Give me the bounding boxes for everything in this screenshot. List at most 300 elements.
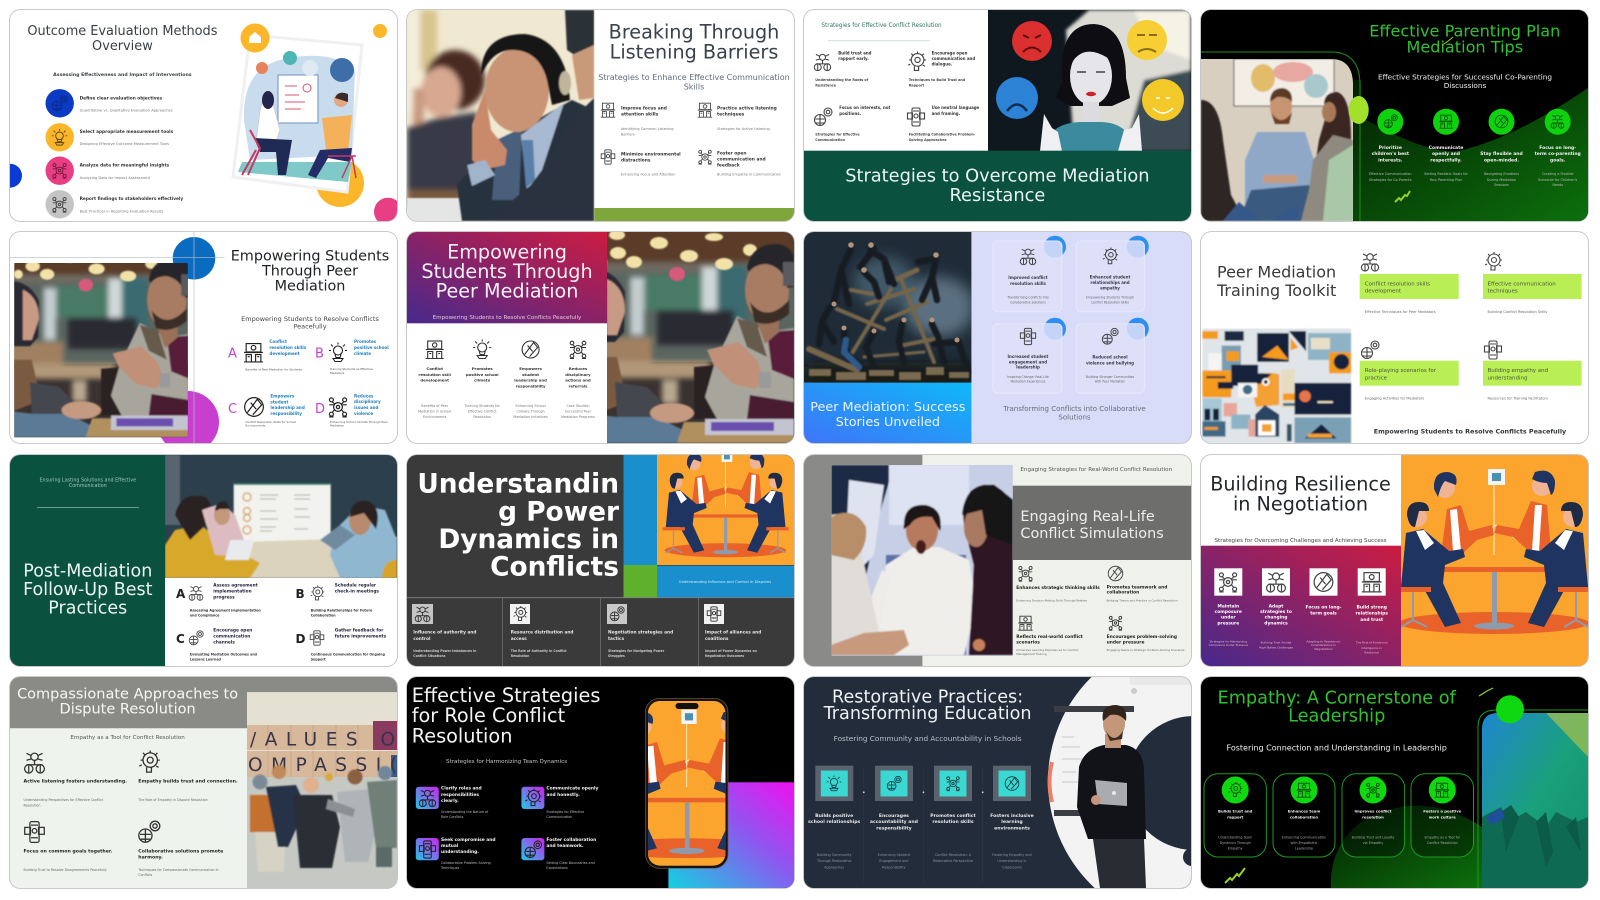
- item: role-play: Role-playing scenarios for: [1365, 368, 1437, 374]
- column: long-term goals: Needs: [1552, 183, 1563, 187]
- item: collaborative solutions: Collaborative solutions promote: [138, 848, 223, 854]
- card: trust: Builds trust and: [1218, 809, 1253, 814]
- column: communicate: [1424, 109, 1468, 182]
- photo: values blocks and figures: [247, 692, 397, 888]
- item: compromise: Collaborative Problem-Solving: [441, 861, 491, 865]
- subtitle: Assessing Effectiveness and Impact of Interventions: [53, 72, 192, 78]
- separator dots: [863, 791, 984, 793]
- column: school climate: Training Students for: [464, 404, 500, 408]
- item: minimize distractions: Minimize environmental: [621, 152, 681, 158]
- item: communicate: and honestly.: [546, 792, 580, 798]
- column: authority: control: [413, 636, 431, 642]
- item: teamwork: Foster collaboration: [546, 837, 596, 843]
- background: green gradient: [1351, 80, 1588, 221]
- item: open dialogue: [908, 50, 975, 87]
- column: inclusive: [990, 766, 1034, 869]
- subtitle: Empowering Students to Resolve Conflicts Peacefully: [433, 315, 582, 321]
- column: long-term goals: [1306, 568, 1342, 651]
- item: skills: Conflict resolution skills: [1365, 281, 1430, 287]
- item: empathy builds trust: [137, 750, 238, 802]
- title: Overview: [92, 39, 153, 54]
- column: leadership: leadership and: [514, 378, 547, 383]
- item: common goals: Focus on common goals together.: [24, 848, 113, 854]
- panel: Understanding Power Dynamics in Conflicts: [407, 455, 794, 666]
- panel: Engaging Real-Life Conflict Simulations: [804, 455, 1191, 666]
- subtitle: Strategies for Overcoming Challenges and Achieving Success: [1214, 538, 1387, 544]
- column: conflict skills: resolution skills: [932, 819, 974, 825]
- column: inclusive: Fosters inclusive: [990, 813, 1034, 819]
- title: Resistance: [949, 185, 1045, 206]
- item A: Benefits of Peer Mediation for Students: [245, 368, 303, 372]
- column: stay flexible: Navigating Emotions: [1484, 172, 1519, 176]
- card: work culture: Empathy as a Tool for: [1424, 836, 1461, 840]
- item D: [296, 628, 387, 661]
- item: skills: Effective Techniques for Peer Mediators: [1365, 310, 1436, 314]
- item C: leadership and: [270, 405, 305, 410]
- photo: heated argument: [832, 465, 1013, 656]
- column: discipline: referrals: [568, 383, 588, 388]
- title: Mediation: [275, 278, 345, 294]
- item: trust: Understanding the Roots of: [815, 78, 869, 82]
- column: children's interests: [1369, 109, 1412, 182]
- column: composure: [1209, 568, 1248, 647]
- subtitle: Fostering Connection and Understanding in Leadership: [1227, 744, 1447, 753]
- card: conflict resolution: Collaborative Solutions: [1010, 300, 1046, 304]
- title: Peer Mediation: [436, 280, 578, 302]
- photo: team meeting at whiteboard: [165, 455, 397, 578]
- column: authority: Conflict Situations: [413, 654, 446, 658]
- decorative circle: blue: [173, 237, 215, 280]
- card: engagement: leadership: [1016, 365, 1040, 370]
- item: neutral language: Facilitating Collaborative Problem-: [909, 132, 976, 136]
- column: skill development: Environments: [423, 415, 447, 419]
- card: team collaboration: with Empathetic: [1291, 841, 1318, 845]
- card: team collaboration: Enhances team: [1288, 809, 1320, 814]
- card: relationships: empathy: [1100, 285, 1120, 290]
- item D: Reduces: [354, 393, 374, 398]
- title: g Power: [498, 496, 619, 528]
- title: Peer Mediation: [1217, 262, 1336, 282]
- item: problem-solving: Encourages problem-solving: [1107, 634, 1177, 640]
- item B: climate: [354, 351, 371, 356]
- card: conflict resolution: Improved conflict: [1008, 275, 1048, 280]
- item: neutral language: and framing.: [932, 111, 961, 116]
- column: resources: The Role of Authority in Conflict: [511, 649, 567, 653]
- column: resources: Resource distribution and: [511, 630, 574, 636]
- column: school climate: climate: [474, 378, 491, 383]
- item: open communication: [699, 150, 781, 176]
- item A: resolution skills: [269, 345, 307, 350]
- column: long-term goals: Focus on long-: [1306, 604, 1342, 610]
- column: long-term goals: goals.: [1550, 157, 1566, 163]
- column: adapt: High-Stakes Challenges: [1259, 646, 1294, 650]
- column: discipline: Mediation Programs: [561, 415, 595, 419]
- column: adapt: Adapt: [1269, 603, 1283, 609]
- column: relationships: [808, 766, 860, 869]
- item: teamwork: and teamwork.: [546, 843, 584, 849]
- column: communicate: Your Parenting Plan: [1430, 178, 1462, 182]
- item: active listening: Strategies for Active Listening: [717, 127, 770, 131]
- item: improve focus: attention skills: [621, 112, 659, 118]
- column: discipline: Case Studies:: [566, 404, 590, 408]
- item: real-world: scenarios: [1016, 639, 1040, 645]
- card: engagement: Increased student: [1008, 354, 1049, 359]
- title: Post-Mediation: [23, 562, 152, 582]
- column: negotiation: [607, 604, 673, 658]
- subtitle: Fostering Community and Accountability in Schools: [834, 734, 1022, 743]
- item A: and Compliance: [190, 613, 220, 617]
- item: clarify roles: clearly.: [441, 798, 459, 804]
- item B: check-in meetings: [335, 589, 379, 595]
- subtitle: Skills: [684, 82, 704, 91]
- item: teamwork: Bridging Theory and Practice in Conflict Resolution: [1107, 598, 1178, 602]
- item C: C: [228, 402, 237, 417]
- column: leadership: [513, 341, 548, 419]
- column: school climate: [464, 340, 500, 419]
- column: skill development: resolution skill: [418, 372, 451, 377]
- title: Listening Barriers: [610, 40, 778, 64]
- column: authority: Understanding Power Imbalances in: [413, 649, 476, 653]
- item: define objectives: Define clear evaluation objectives: [80, 95, 162, 101]
- item: interests: Strategies for Effective: [815, 132, 860, 136]
- item: interests: Focus on interests, not: [839, 105, 891, 110]
- item: define objectives: [46, 89, 173, 118]
- item: active listening: Active listening fosters understanding.: [24, 778, 127, 784]
- item B: [315, 339, 389, 375]
- title: Conflict Simulations: [1020, 526, 1164, 542]
- column: inclusive: environments: [994, 825, 1030, 831]
- item: compromise: Seek compromise and: [441, 837, 496, 843]
- column: accountability: Engagement and: [879, 859, 908, 863]
- column: long-term goals: [1535, 109, 1581, 187]
- gradient corner: [668, 782, 794, 888]
- title: Transforming Education: [823, 704, 1032, 724]
- column: relationships: relationships: [1356, 610, 1388, 616]
- illustration: collage: [1201, 328, 1352, 443]
- item: clarify roles: Clarify roles and: [441, 786, 482, 792]
- item: real-world: Reflects real-world conflict: [1016, 634, 1083, 640]
- item C: Empowers: [270, 393, 295, 398]
- item D: Enhancing School Climate Through Peer: [330, 420, 389, 424]
- card: team collaboration: collaboration: [1290, 814, 1318, 819]
- column: discipline: Successful Peer: [565, 410, 592, 414]
- column: accountability: accountability and: [870, 819, 918, 825]
- frame outline: [1478, 710, 1588, 888]
- item: collaborative solutions: harmony.: [138, 854, 163, 860]
- item: clarify roles: responsibilities: [441, 792, 479, 798]
- column: resources: Resolution: [511, 654, 529, 658]
- item D: D: [296, 632, 306, 646]
- left green block: [10, 455, 165, 666]
- left gray block: [804, 455, 922, 666]
- item: collaborative solutions: Techniques for Compassionate Communication in: [137, 868, 219, 872]
- illustration: negotiation table: [657, 455, 794, 565]
- column: long-term goals: Negotiations: [1314, 647, 1333, 651]
- subtitle: Empowering Students to Resolve Conflicts Peacefully: [1374, 428, 1567, 436]
- item: role-play: Engaging Activities for Mediators: [1365, 397, 1424, 401]
- item: communication: techniques: [1488, 289, 1518, 295]
- column: relationships: Intelligence in: [1362, 646, 1382, 650]
- card: conflict resolution: Improves conflict: [1355, 809, 1392, 814]
- column: long-term goals: Adapting to Resistance:: [1306, 640, 1341, 644]
- item: open communication: Building Empathy in Communication: [717, 172, 781, 176]
- top text: Communication: [69, 483, 107, 489]
- title: Peer Mediation: Success: [810, 400, 966, 415]
- item: improve focus: Improve focus and: [621, 106, 667, 112]
- column: skill development: Conflict: [426, 366, 443, 371]
- item: measurement tools: Select appropriate measurement tools: [80, 129, 174, 135]
- card: relationships: Conflict Resolution Skills: [1091, 300, 1129, 304]
- card: trust: Dynamics Through: [1220, 841, 1251, 845]
- column: accountability: Enhancing Student: [878, 853, 911, 857]
- column: leadership: Mediation Initiatives: [513, 415, 548, 419]
- title block: [804, 383, 971, 444]
- item: open communication: feedback: [717, 162, 740, 168]
- squiggle bottom: [1225, 868, 1245, 883]
- card: relationships: [1076, 236, 1149, 312]
- item: teamwork: Setting Clear Boundaries and: [546, 861, 595, 865]
- subtitle: Strategies for Effective Conflict Resolution: [821, 23, 942, 29]
- card: team collaboration: [1273, 774, 1335, 857]
- title: Breaking Through: [609, 20, 779, 44]
- column: skill development: Mediation in School: [418, 410, 451, 414]
- title: Resolution: [412, 724, 512, 748]
- card: trust: rapport: [1227, 814, 1243, 819]
- column: communicate: respectfully.: [1430, 157, 1462, 163]
- item D: Mediation: [330, 424, 344, 428]
- item: role-play: practice: [1365, 376, 1388, 382]
- column: discipline: Reduces: [569, 366, 588, 371]
- item B: Promotes: [354, 339, 377, 344]
- item: empathy: Resources for Training Facilitators: [1488, 397, 1548, 401]
- item: interests: [814, 105, 891, 142]
- item D: D: [315, 402, 325, 417]
- item: real-world: [1016, 616, 1083, 656]
- item C: communication: [213, 634, 250, 640]
- item: report findings: Report findings to stakeholders effectively: [80, 196, 183, 202]
- column: relationships: [1355, 568, 1388, 655]
- column: composure: Strategies for Maintaining: [1210, 640, 1247, 644]
- column: adapt: changing: [1265, 614, 1287, 620]
- column: long-term goals: Schedule for Children's: [1538, 178, 1578, 182]
- item: interests: Communication: [815, 138, 846, 142]
- item: communication: Building Conflict Resolution Skills: [1488, 310, 1547, 314]
- item C: C: [176, 632, 185, 646]
- top text: Engaging Strategies for Real-World Conflict Resolution: [1020, 467, 1173, 473]
- column: children's interests: children's best: [1372, 151, 1410, 157]
- item: empathy builds trust: The Role of Empathy in Dispute Resolution: [137, 798, 208, 802]
- item: open dialogue: dialogue.: [932, 62, 953, 67]
- item: real-world: Management Training: [1016, 652, 1047, 656]
- item: analyze data: Analyzing Data for Impact Assessment: [80, 176, 151, 180]
- item C: [176, 628, 258, 661]
- item D: Continuous Communication for Ongoing: [311, 652, 386, 656]
- item A: [176, 583, 261, 617]
- column: accountability: Encourages: [879, 813, 909, 819]
- subtitle: Peacefully: [293, 322, 327, 330]
- card: conflict resolution: [993, 236, 1066, 312]
- item C: Encourage open: [213, 628, 252, 634]
- item: empathy: understanding: [1488, 376, 1527, 382]
- card: work culture: [1411, 774, 1474, 857]
- title: Practices: [48, 598, 127, 618]
- column: long-term goals: Creating a Flexible: [1542, 172, 1574, 176]
- column: composure: Composure Under Pressure: [1209, 643, 1248, 647]
- background green blob: [1331, 806, 1482, 888]
- item: active listening: Resolution: [24, 803, 40, 807]
- column: relationships: Resilience: [1364, 651, 1379, 655]
- decorative squiggle: [1395, 191, 1410, 202]
- item: real-world: Immersive Learning Experiences for Conflict: [1016, 648, 1079, 652]
- item C: [228, 393, 305, 428]
- column: accountability: [870, 766, 918, 869]
- decorative circle: bottom pink: [374, 198, 402, 226]
- column: leadership: student: [522, 372, 539, 377]
- item: clarify roles: Understanding the Nature of: [441, 810, 489, 814]
- subtitle: Understanding Influence and Control in Disputes: [679, 579, 771, 584]
- illustration: negotiation table: [1401, 455, 1588, 666]
- item: open communication: communication and: [717, 156, 766, 162]
- item: minimize distractions: Enhancing Focus and Attention: [621, 172, 675, 176]
- column: adapt: dynamics: [1264, 620, 1288, 626]
- item: interests: positions.: [839, 111, 862, 116]
- card: relationships: relationships and: [1090, 280, 1130, 285]
- column: school climate: Promotes: [472, 366, 493, 371]
- column: adapt: strategies to: [1260, 609, 1292, 615]
- item B: Mediators: [330, 371, 345, 375]
- title: Outcome Evaluation Methods: [27, 24, 218, 39]
- item: empathy: [1483, 341, 1582, 401]
- subtitle: Strategies for Harmonizing Team Dynamics: [446, 759, 567, 765]
- column: school climate: Resolution: [473, 415, 491, 419]
- title: for Role Conflict: [412, 704, 566, 727]
- item B: Building Relationships for Future: [311, 608, 373, 612]
- item D: Support: [311, 657, 326, 661]
- column: alliances: coalitions: [705, 636, 729, 642]
- column: relationships: The Role of Emotional: [1355, 641, 1388, 645]
- column: communicate: Communicate: [1429, 145, 1463, 151]
- item: common goals: [24, 822, 113, 872]
- item C: channels: [213, 640, 235, 646]
- title: Leadership: [1288, 706, 1385, 726]
- item C: Evaluating Mediation Outcomes and: [190, 652, 258, 656]
- photo: students talking: [14, 263, 188, 438]
- column: composure: pressure: [1217, 620, 1239, 626]
- item: strategic thinking: [1016, 566, 1100, 602]
- illustration: woman and emotion faces: [988, 10, 1191, 151]
- column: inclusive: learning: [1001, 819, 1023, 825]
- item: common goals: Building Trust to Resolve Disagreements Peacefully: [24, 868, 107, 872]
- title: Understandin: [417, 468, 619, 500]
- column: composure: Maintain: [1217, 603, 1239, 609]
- item D: [315, 393, 389, 428]
- column: resources: access: [511, 637, 527, 642]
- column: negotiation: Strategies for Navigating Power: [608, 649, 665, 653]
- panel: Breaking Through Listening Barriers: [407, 10, 794, 221]
- card: conflict resolution: [1342, 774, 1405, 857]
- decorative ball: [1349, 96, 1369, 124]
- item: teamwork: [521, 837, 596, 870]
- item: clarify roles: Role Conflicts: [441, 815, 464, 819]
- item: open communication: Foster open: [717, 150, 746, 156]
- header gradient: [407, 232, 607, 323]
- title: Effective Parenting Plan: [1369, 22, 1560, 40]
- column: relationships: school relationships: [808, 819, 860, 825]
- item: trust: Resistance: [815, 83, 837, 87]
- card: relationships: Empowering Students Through: [1086, 295, 1134, 299]
- card: conflict resolution: resolution skills: [1010, 281, 1047, 286]
- item: communicate: Strategies for Effective: [546, 810, 584, 814]
- panel: Effective Parenting Plan Mediation Tips: [1201, 10, 1588, 221]
- card: team collaboration: Enhancing Communication: [1282, 836, 1326, 840]
- panel: Post-Mediation Follow-Up Best Practices: [10, 455, 397, 666]
- item: problem-solving: under pressure: [1107, 639, 1144, 645]
- card: trust: Empathy: [1228, 847, 1243, 851]
- panel: Building Resilience in Negotiation: [1201, 455, 1588, 666]
- item: empathy builds trust: Empathy builds trust and connection.: [138, 778, 238, 784]
- column: children's interests: interests.: [1378, 157, 1403, 163]
- item: neutral language: [908, 105, 980, 142]
- item: improve focus: [601, 103, 674, 136]
- item A: Conflict: [269, 339, 287, 344]
- column: school climate: positive school: [466, 372, 499, 377]
- background: black curve: [1201, 10, 1588, 151]
- card: engagement: Inspiring Change: Real-Life: [1007, 375, 1049, 379]
- column: conflict skills: Restorative Perspective: [933, 859, 973, 863]
- column: composure: under: [1221, 614, 1236, 620]
- footer band: [594, 208, 794, 221]
- item: neutral language: Solving Approaches: [909, 138, 947, 142]
- panel: Compassionate Approaches to Dispute Resolution: [10, 677, 397, 888]
- blocks lettering second row: OMPASSI(: [248, 755, 397, 776]
- column: alliances: [704, 604, 761, 658]
- item: active listening: techniques: [717, 112, 745, 118]
- card: engagement: Mediation Experiences: [1010, 380, 1046, 384]
- card: conflict resolution: resolution: [1362, 814, 1384, 819]
- title: Stories Unveiled: [836, 415, 940, 430]
- item: strategic thinking: Enhances strategic thinking skills: [1016, 585, 1100, 591]
- card: work culture: Fosters a positive: [1423, 809, 1462, 814]
- card: work culture: work culture: [1429, 814, 1456, 819]
- column: stay flexible: During Mediation: [1487, 178, 1516, 182]
- panel: Effective Strategies for Role Conflict Resolution: [407, 677, 794, 888]
- dividers: [864, 767, 983, 882]
- subtitle: Empowering Students to Resolve Conflicts: [241, 315, 379, 323]
- column: resources: [510, 604, 574, 658]
- decorative circle: left blue: [0, 164, 22, 188]
- title band: [1013, 486, 1191, 560]
- item C: Environments: [245, 424, 266, 428]
- card: violence: [1076, 318, 1149, 393]
- column: stay flexible: [1480, 109, 1523, 187]
- column: authority: [412, 604, 476, 658]
- panel: Outcome Evaluation Methods Overview: [10, 10, 397, 221]
- item: compromise: Techniques: [440, 866, 460, 870]
- subtitle: Solutions: [1058, 414, 1091, 422]
- card: violence: Reduced school: [1092, 355, 1128, 360]
- title: Empathy: A Cornerstone of: [1218, 688, 1457, 708]
- footer band: [804, 151, 1191, 222]
- item: measurement tools: [46, 123, 174, 152]
- column: discipline: disciplinary: [565, 372, 591, 377]
- item C: Lessons Learned: [190, 657, 222, 661]
- item: communicate: [521, 786, 598, 819]
- column: adapt: Building Trust Amidst: [1261, 641, 1292, 645]
- title: Effective Strategies: [412, 684, 600, 707]
- panel: Empathy A Cornerstone of Leadership: [1201, 677, 1588, 888]
- item: problem-solving: Engaging Teams in Strategic Problem-Solving Scenarios: [1107, 648, 1185, 652]
- photo: man with headphones: [407, 10, 594, 221]
